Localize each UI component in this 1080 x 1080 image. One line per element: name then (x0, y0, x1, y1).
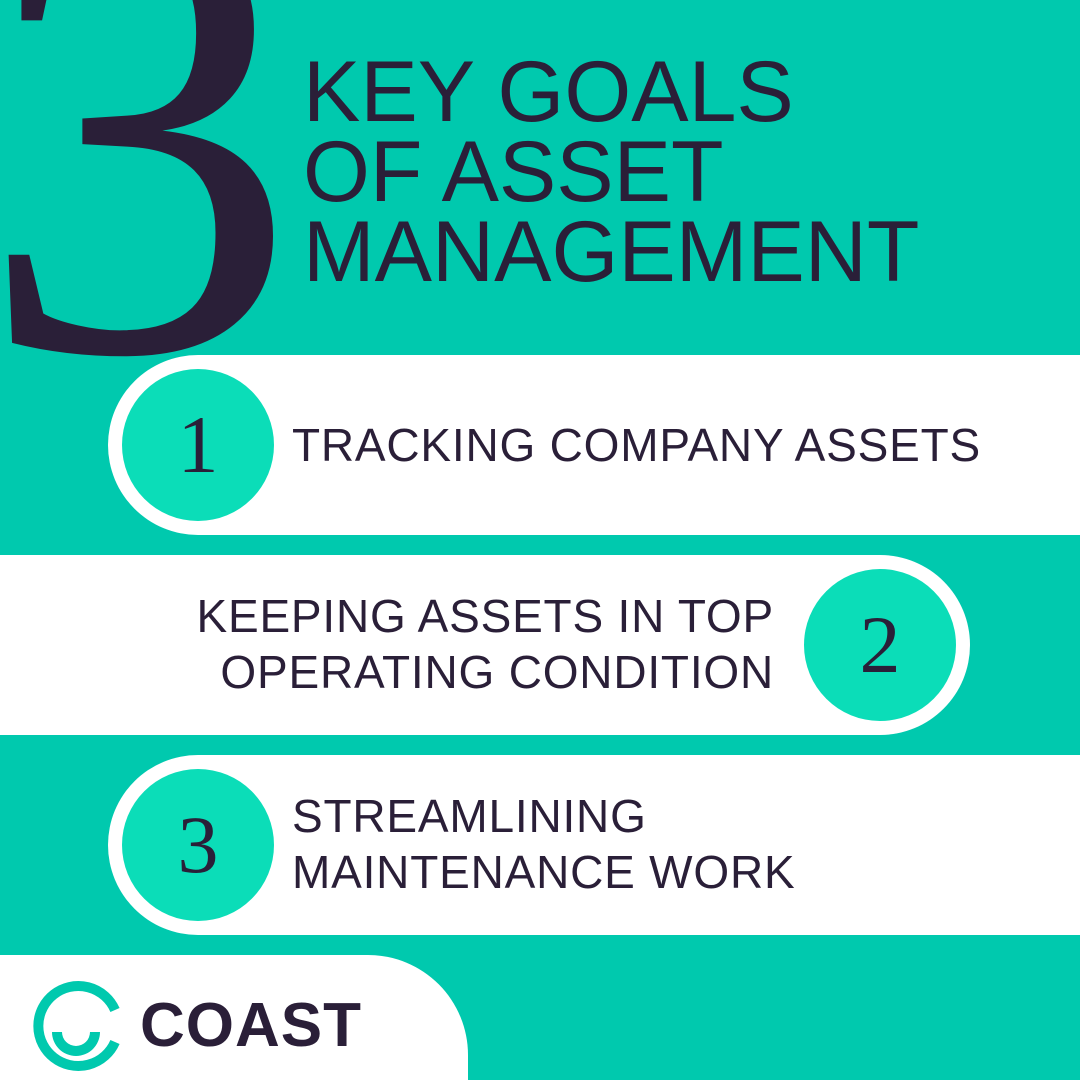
icon: coast logo mark (33, 981, 120, 1071)
icon: number 2 circle: 2 (860, 599, 900, 690)
icon: number 3 circle: 3 (178, 799, 218, 890)
panel: goal 1 (108, 355, 1080, 535)
logo text: COAST (140, 991, 362, 1060)
title: OF ASSET (303, 124, 724, 220)
text: goal 2 (196, 590, 774, 698)
title (303, 44, 919, 300)
title: MANAGEMENT (303, 204, 919, 300)
panel: goal 3 (108, 755, 1080, 935)
panel: goal 2 (0, 555, 970, 735)
icon: number 1 circle (122, 369, 274, 521)
text: goal 2: KEEPING ASSETS IN TOP (196, 590, 774, 642)
icon: number 3 circle (122, 769, 274, 921)
text: goal 3: STREAMLINING (292, 790, 647, 842)
icon: number 2 circle (804, 569, 956, 721)
panel: logo (0, 955, 468, 1080)
text: goal 3 (292, 790, 795, 898)
icon: number 1 circle: 1 (178, 399, 218, 490)
text: goal 2: OPERATING CONDITION (220, 646, 774, 698)
title: KEY GOALS (303, 44, 794, 140)
text: goal 1: TRACKING COMPANY ASSETS (292, 419, 981, 471)
text: goal 3: MAINTENANCE WORK (292, 846, 795, 898)
